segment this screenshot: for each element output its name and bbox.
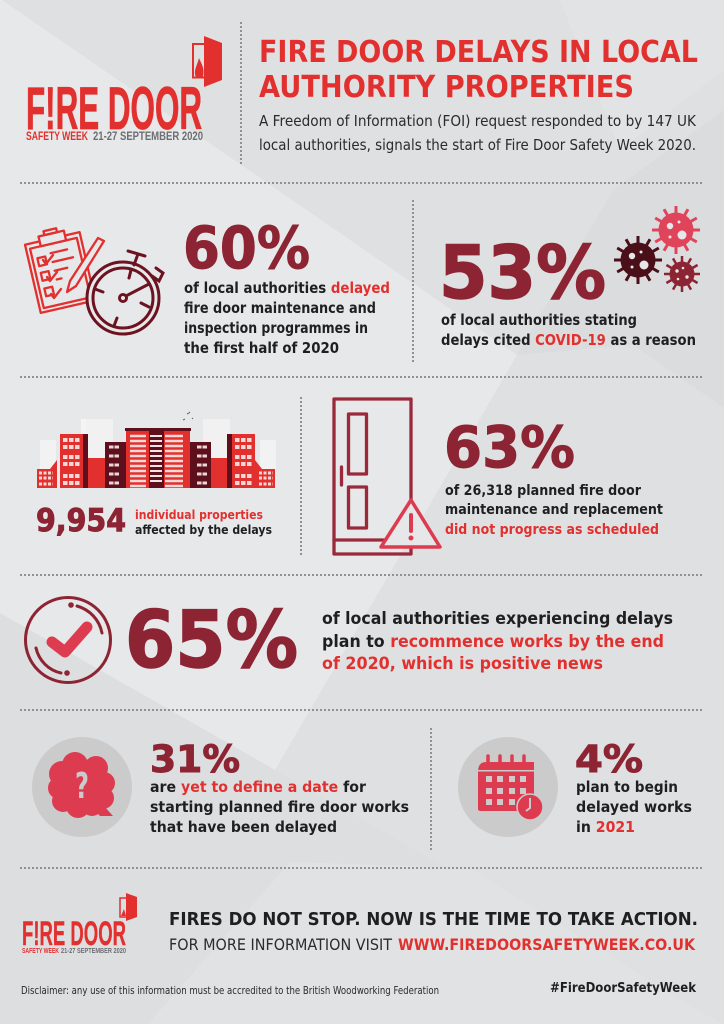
hashtag: #FireDoorSafetyWeek	[550, 981, 696, 996]
panel: 63% planned works	[334, 399, 663, 554]
call to action: WWW.FIREDOORSAFETYWEEK.CO.UK	[398, 935, 696, 954]
panel: 4% in 2021	[458, 737, 692, 837]
icon: door with warning triangle	[334, 399, 440, 554]
panel: 9,954 properties	[36, 412, 276, 539]
description: 60%: of local authorities delayed	[184, 279, 390, 297]
title: AUTHORITY PROPERTIES	[259, 70, 634, 105]
description: 63%: maintenance and replacement	[445, 502, 663, 518]
description: 65%: plan to recommence works by the end	[322, 632, 664, 652]
icon: clipboard and pencil	[23, 223, 104, 313]
description: 4%: plan to begin	[576, 778, 678, 796]
panel: 53% COVID-19	[439, 206, 700, 349]
description: 31%	[150, 778, 409, 836]
panel: 65% recommence	[26, 596, 673, 686]
panel: 60% delayed	[23, 214, 390, 357]
description: 60%: the first half of 2020	[184, 339, 339, 357]
description: properties	[135, 507, 272, 537]
description: 4%: delayed works	[576, 798, 692, 816]
intro text	[259, 112, 697, 154]
icon: question speech cloud	[32, 737, 132, 837]
icon: calendar and clock	[458, 737, 558, 837]
footer logo: SAFETY WEEK	[22, 948, 59, 955]
footer logo: F!RE DOOR	[22, 915, 126, 953]
icon: virus pink	[652, 206, 700, 254]
description: 53%: of local authorities stating	[441, 311, 637, 329]
description: 4%	[576, 778, 692, 836]
stat: 53%: 53%	[439, 231, 606, 316]
title	[259, 35, 698, 105]
logo: Fire Door Safety Week	[26, 36, 222, 143]
disclaimer: Disclaimer: any use of this information must be accredited to the British Woodworking Federation	[21, 985, 439, 997]
description: 63%: did not progress as scheduled	[445, 522, 659, 538]
call to action: FIRES DO NOT STOP. NOW IS THE TIME TO TAKE ACTION.	[169, 909, 698, 930]
description: 53%	[441, 311, 696, 349]
description: 4%: in 2021	[576, 818, 635, 836]
stat: 31%: 31%	[150, 738, 240, 781]
stat: 4%: 4%	[575, 738, 643, 781]
icon: stopwatch	[87, 251, 163, 334]
icon: virus dark	[614, 236, 662, 284]
logo: Fire Door Safety Week: 21-27 SEPTEMBER 2020	[93, 131, 203, 143]
icon: city buildings	[37, 412, 276, 488]
icon: fire exit door	[193, 36, 222, 87]
icon: virus red	[664, 256, 700, 292]
description: 65%: of local authorities experiencing delays	[322, 609, 673, 629]
stat: 63%: 63%	[444, 415, 575, 481]
logo: Fire Door Safety Week: SAFETY WEEK	[26, 131, 89, 143]
footer logo	[22, 893, 137, 955]
description: 31%: starting planned fire door works	[150, 798, 409, 816]
description: properties: individual properties	[135, 507, 263, 522]
icon: check mark circle	[26, 598, 110, 682]
icon: small fire exit door	[120, 893, 137, 921]
description: 63%: of 26,318 planned fire door	[445, 483, 641, 499]
description: 63%	[445, 483, 663, 538]
description: 31%: are yet to define a date for	[150, 778, 367, 796]
call to action: FOR MORE INFORMATION VISIT	[169, 935, 392, 954]
stat: 9,954: 9,954	[36, 503, 126, 539]
description: properties: affected by the delays	[135, 522, 272, 537]
call to action	[169, 909, 698, 954]
description: 65%	[322, 609, 673, 674]
description: 60%: fire door maintenance and	[184, 299, 376, 317]
description: 60%: inspection programmes in	[184, 319, 368, 337]
footer logo: 21-27 SEPTEMBER 2020	[61, 948, 126, 955]
description: 65%: of 2020, which is positive news	[322, 654, 603, 674]
description: 53%: delays cited COVID-19 as a reason	[441, 331, 696, 349]
logo: Fire Door Safety Week: F!RE DOOR	[26, 75, 202, 142]
panel: 31% undefined date	[32, 737, 409, 837]
description: 31%: that have been delayed	[150, 818, 337, 836]
description: 60%	[184, 279, 390, 357]
stat: 65%: 65%	[125, 596, 298, 686]
icon: question speech cloud: ?	[75, 766, 89, 807]
stat: 60%: 60%	[183, 214, 310, 282]
